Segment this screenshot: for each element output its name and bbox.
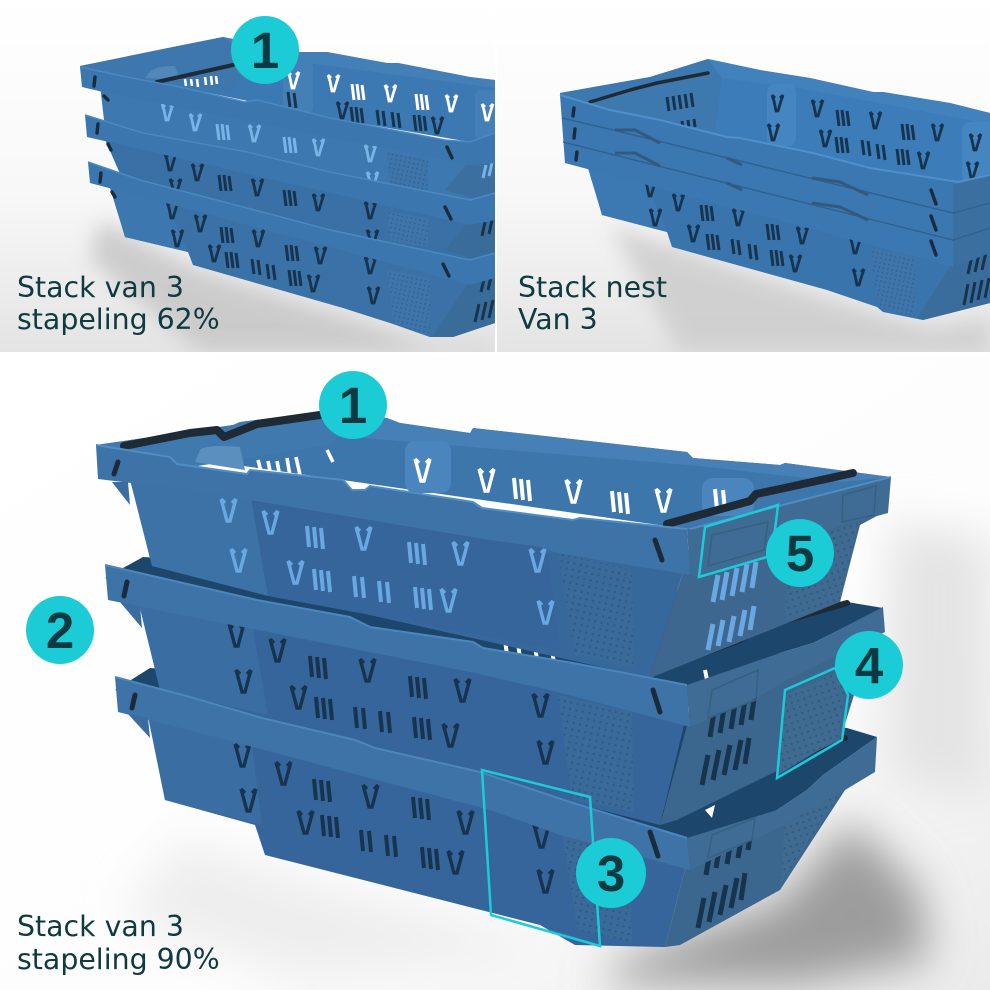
highlight outline: zone 3 — [482, 770, 600, 946]
crate stack, 62% stacking — [80, 37, 505, 337]
badge: 4: 4 — [855, 637, 884, 694]
label: stack nest van 3 — [518, 271, 667, 336]
badge: 3: 3 — [597, 845, 625, 902]
label: stack van 3, stapeling 90%: stapeling 90% — [17, 943, 220, 976]
badge: 2: 2 — [46, 602, 74, 659]
panel: large stack background — [0, 352, 990, 990]
inner back wall — [80, 37, 505, 150]
top crate body — [96, 412, 891, 678]
badge: 5 — [766, 519, 834, 587]
highlight outline: zone 4 — [777, 668, 848, 778]
panel: stack nest van 3 — [497, 59, 990, 352]
badge: 4 — [835, 631, 903, 699]
badge: 2 — [26, 596, 94, 664]
middle crate wall — [103, 135, 495, 265]
label: stack van 3, stapeling 62% — [17, 271, 220, 336]
bottom crate rim — [115, 677, 877, 870]
middle crate rim — [105, 565, 885, 727]
rims — [80, 67, 495, 285]
panel: stack van 3, stapeling 62% — [0, 37, 495, 352]
label: stack van 3, stapeling 62%: Stack van 3 — [17, 271, 184, 304]
highlight outline: zone 5 — [699, 505, 778, 577]
badge: 1 (small stack) — [231, 16, 299, 84]
label: stack van 3, stapeling 90% — [17, 910, 220, 976]
crate stack, nested — [560, 59, 990, 320]
label: stack nest van 3: Stack nest — [518, 271, 667, 304]
bottom crate wall — [587, 160, 990, 320]
bottom crate wall — [110, 185, 495, 337]
badge: 5: 5 — [786, 525, 814, 582]
middle crate body — [105, 557, 883, 825]
bottom crate body — [115, 668, 877, 947]
badge: 3 — [576, 838, 646, 908]
label: stack van 3, stapeling 62%: stapeling 62% — [17, 303, 220, 336]
crate stack: large, 90% stacking — [96, 412, 891, 947]
label: stack van 3, stapeling 90%: Stack van 3 — [17, 910, 184, 943]
label: stack nest van 3: Van 3 — [518, 303, 598, 336]
badge: 1 (small stack): 1 — [251, 22, 279, 79]
badge: 1 (large stack) — [319, 371, 387, 439]
top crate rim — [96, 445, 891, 577]
rims — [560, 95, 990, 267]
top crate wall — [100, 92, 495, 200]
badge: 1 (large stack): 1 — [339, 377, 367, 434]
inner back wall — [560, 59, 990, 184]
